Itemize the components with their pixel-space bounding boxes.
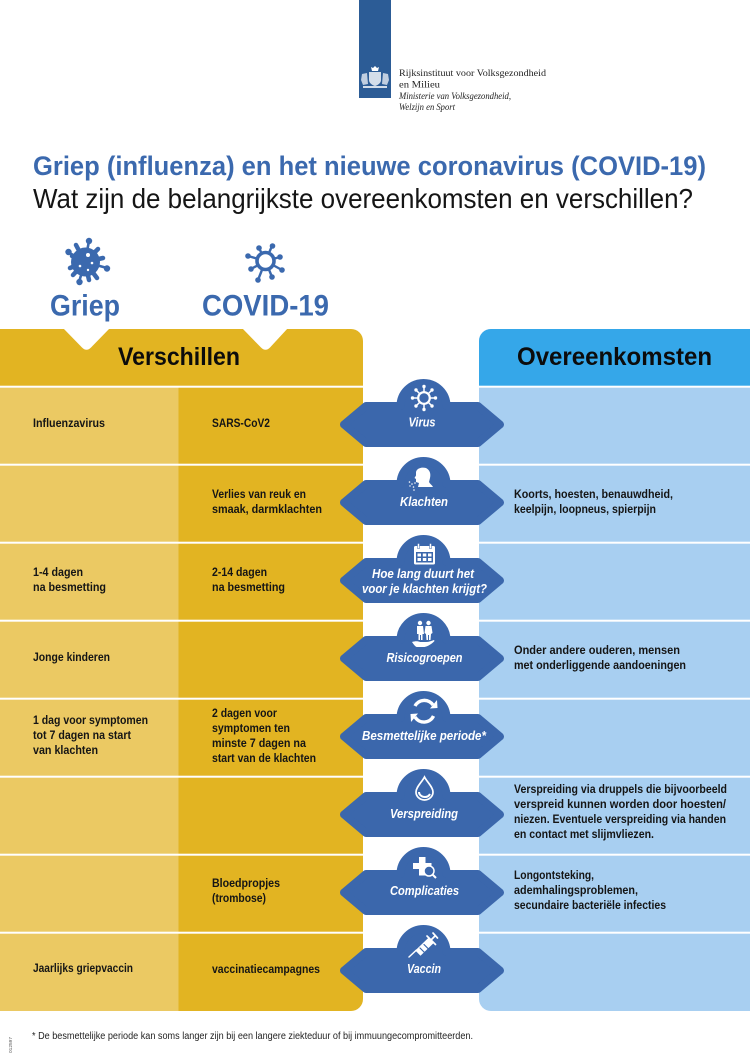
badge: klachten <box>344 461 500 521</box>
row: virus text griep: Influenzavirus <box>33 418 105 430</box>
row: risicogroepen griep: Jonge kinderen <box>33 652 110 664</box>
panel: verschillen <box>0 328 363 1011</box>
label: Risicogroepen <box>386 651 463 665</box>
heading: Griep: Griep <box>50 290 120 322</box>
row: incubatie covid: na besmetting <box>212 582 285 594</box>
row: besmettelijk covid <box>212 708 316 765</box>
document code: 012597 <box>8 1036 13 1053</box>
notch: griep <box>63 328 110 350</box>
row: incubatie griep <box>33 567 106 594</box>
row: klachten covid: Verlies van reuk en <box>212 489 306 501</box>
badge: vaccin <box>344 929 500 989</box>
icon: coughing person <box>409 468 433 491</box>
label: Besmettelijke periode* <box>362 729 487 743</box>
label: voor je klachten krijgt? <box>362 582 487 596</box>
label: Vaccin <box>407 962 441 976</box>
icon: calendar <box>414 544 435 564</box>
heading: COVID-19: COVID-19 <box>202 290 329 322</box>
footnote: * De besmettelijke periode kan soms langer zijn bij een langere ziekteduur of bij immuungecompromitteerden. <box>32 1031 473 1042</box>
logo text: Welzijn en Sport <box>399 102 455 112</box>
badge: besmettelijke periode <box>344 695 500 755</box>
badge: complicaties <box>344 851 500 911</box>
logo text: en Milieu <box>399 80 440 90</box>
badge: verspreiding <box>344 773 500 833</box>
row: klachten covid <box>212 489 322 516</box>
row: complicaties covid: Bloedpropjes <box>212 878 280 890</box>
row: incubatie covid: 2-14 dagen <box>212 567 267 579</box>
label: Complicaties <box>390 884 459 898</box>
badge: virus <box>344 383 500 443</box>
label: Hoe lang duurt het <box>372 567 475 581</box>
row: besmettelijk covid: symptomen ten <box>212 723 290 735</box>
badge: risicogroepen <box>344 617 500 677</box>
notch: covid <box>242 328 288 350</box>
icon: people on hand <box>412 621 434 647</box>
badge: incubatietijd <box>344 539 500 599</box>
row: risicogroepen overeenkomsten: met onderliggende aandoeningen <box>514 660 686 672</box>
icon: medical cross with magnifier <box>413 857 436 878</box>
title: Wat zijn de belangrijkste overeenkomsten en verschillen? <box>33 183 693 214</box>
logo text: Rijksinstituut voor Volksgezondheid <box>399 68 546 79</box>
title <box>33 151 706 214</box>
label: Virus <box>408 416 436 430</box>
row: besmettelijk griep: 1 dag voor symptomen <box>33 715 148 727</box>
row: besmettelijk covid: minste 7 dagen na <box>212 738 307 750</box>
row: verspreiding overeenkomsten: en contact met slijmvliezen. <box>514 829 654 841</box>
icon: covid virus <box>245 243 285 283</box>
icon: syringe <box>409 933 438 957</box>
row: besmettelijk covid: start van de klachten <box>212 753 316 765</box>
icon: influenza virus <box>65 238 110 285</box>
row: complicaties covid <box>212 878 280 905</box>
row: incubatie griep: na besmetting <box>33 582 106 594</box>
row: besmettelijk griep <box>33 715 148 757</box>
row: virus text covid: SARS-CoV2 <box>212 418 270 430</box>
logo text <box>398 68 546 112</box>
heading: Overeenkomsten: Overeenkomsten <box>517 343 712 371</box>
row: klachten covid: smaak, darmklachten <box>212 504 322 516</box>
row: besmettelijk griep: tot 7 dagen na start <box>33 730 131 742</box>
row: verspreiding overeenkomsten: niezen. Eventuele verspreiding via handen <box>514 814 726 826</box>
row: vaccin covid: vaccinatiecampagnes <box>212 964 320 976</box>
row: incubatie covid <box>212 567 285 594</box>
row: complicaties overeenkomsten: Longontsteking, <box>514 870 594 882</box>
row: verspreiding overeenkomsten: verspreid kunnen worden door hoesten/ <box>514 799 727 811</box>
row: incubatie griep: 1-4 dagen <box>33 567 83 579</box>
row: verspreiding overeenkomsten <box>514 784 727 841</box>
icon: virus <box>411 385 437 411</box>
icon: coat of arms <box>361 66 389 88</box>
row: complicaties covid: (trombose) <box>212 893 266 905</box>
row: complicaties overeenkomsten: ademhalingsproblemen, <box>514 885 638 897</box>
row: complicaties overeenkomsten <box>514 870 666 912</box>
row: risicogroepen overeenkomsten: Onder andere ouderen, mensen <box>514 645 680 657</box>
row: risicogroepen overeenkomsten <box>514 645 686 672</box>
row: verspreiding overeenkomsten: Verspreiding via druppels die bijvoorbeeld <box>514 784 727 796</box>
icon: droplet <box>416 777 433 800</box>
label <box>362 567 487 596</box>
icon: cycle arrows <box>410 700 438 722</box>
logo: Rijksoverheid <box>359 0 546 112</box>
row: klachten overeenkomsten <box>514 489 673 516</box>
row: vaccin griep: Jaarlijks griepvaccin <box>33 963 133 975</box>
label: Klachten <box>400 495 448 509</box>
title: Griep (influenza) en het nieuwe coronavirus (COVID-19) <box>33 151 706 181</box>
row: klachten overeenkomsten: Koorts, hoesten, benauwdheid, <box>514 489 673 501</box>
panel: overeenkomsten <box>479 329 750 1011</box>
logo text: Ministerie van Volksgezondheid, <box>398 91 511 101</box>
row: besmettelijk griep: van klachten <box>33 745 98 757</box>
heading: Verschillen: Verschillen <box>118 343 240 371</box>
row: klachten overeenkomsten: keelpijn, loopneus, spierpijn <box>514 504 656 516</box>
row: besmettelijk covid: 2 dagen voor <box>212 708 277 720</box>
row: complicaties overeenkomsten: secundaire bacteriële infecties <box>514 900 666 912</box>
label: Verspreiding <box>390 807 458 821</box>
